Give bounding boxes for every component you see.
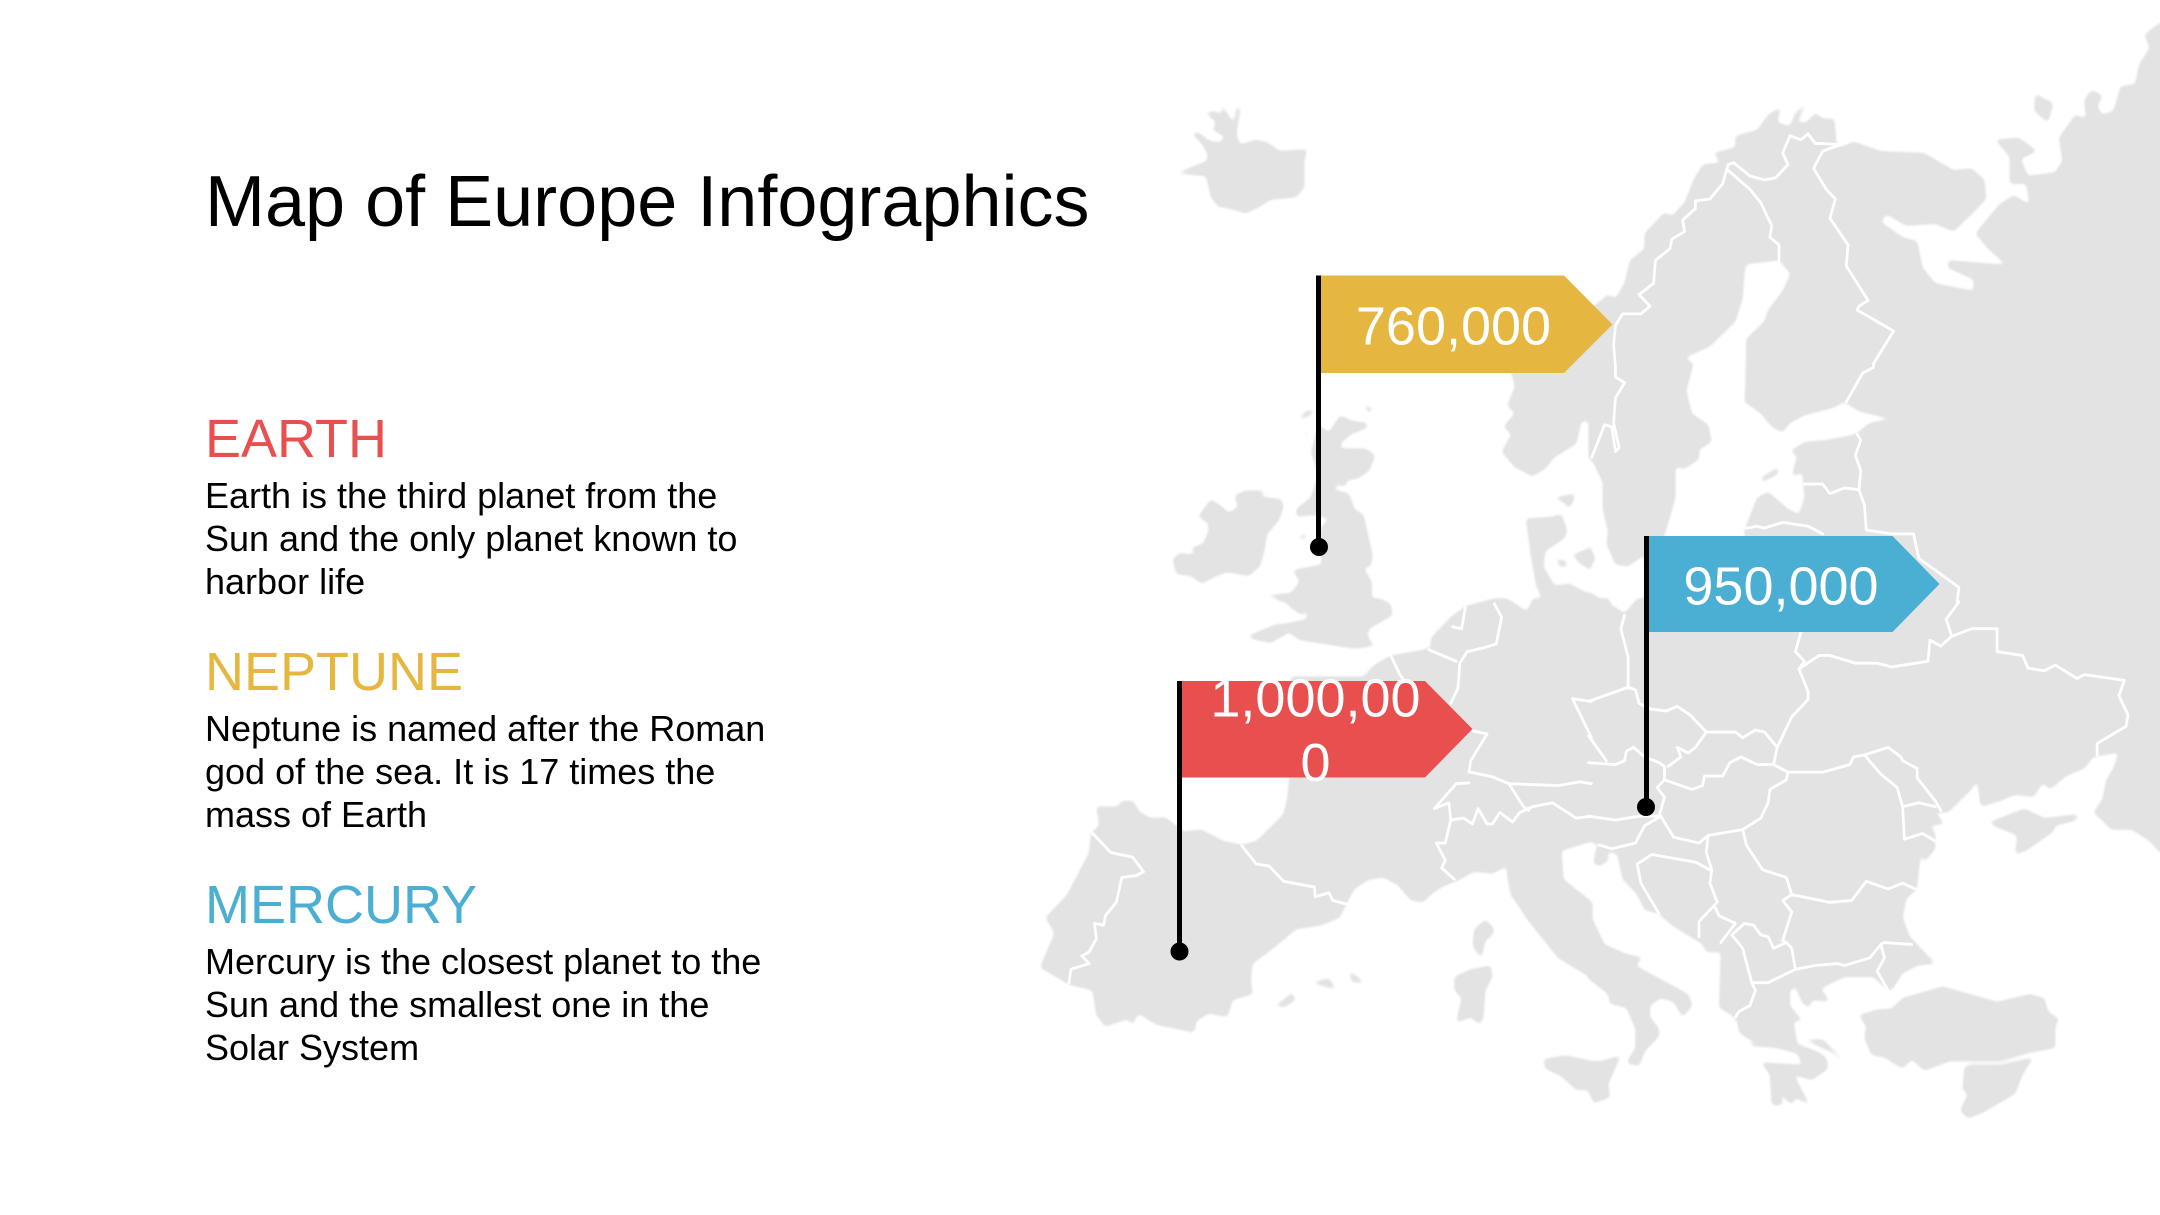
land: south-west (France, Iberia, islands) [1040, 598, 1593, 1090]
text: Mercury description: Solar System [205, 1027, 419, 1068]
borders: Nordic and Baltic [1592, 134, 1959, 602]
Iceland [1176, 104, 1307, 214]
islands and south coast [1589, 94, 2053, 602]
heading: Earth: EARTH [205, 409, 387, 469]
borders: central and eastern Europe [1589, 602, 2128, 1017]
flag: yellow 760,000 [1310, 276, 1612, 556]
text: Mercury description: Mercury is the closest planet to the [205, 941, 761, 982]
land: south-east (central Europe, Balkans, Ukraine, Turkey) [1589, 598, 2160, 1119]
section: Earth [205, 409, 737, 602]
Ireland [1173, 491, 1284, 584]
heading: Neptune: NEPTUNE [205, 642, 463, 702]
central and eastern land mass [1589, 598, 2160, 1105]
flag: red 1,000,000 [1170, 668, 1472, 960]
northern land mass [1589, 23, 2160, 602]
section: Mercury [205, 875, 761, 1068]
southern England [1247, 598, 1393, 649]
flag: blue 950,000 [1637, 536, 1940, 816]
land masses [1025, 5, 2160, 1210]
Italian peninsula [1589, 902, 1693, 1066]
text: Neptune description: Neptune is named after the Roman [205, 708, 765, 749]
Scottish islands [1296, 404, 1373, 540]
text: Mercury description: Sun and the smallest one in the [205, 984, 709, 1025]
section: Neptune [205, 642, 765, 835]
text: Neptune description: god of the sea. It is 17 times the [205, 751, 715, 792]
flag: yellow 760,000: 760,000 [1356, 296, 1551, 356]
title: Map of Europe Infographics [205, 162, 1090, 242]
text: Neptune description: mass of Earth [205, 794, 427, 835]
Crimea [1990, 809, 2077, 854]
flag: red 1,000,000: 0 [1300, 733, 1331, 793]
land: north-east (Scandinavia, Finland, Baltics, Russia) [1589, 23, 2160, 602]
Norway south [1502, 306, 1593, 476]
Denmark [1526, 494, 1591, 602]
map of Europe [1025, 5, 2160, 1210]
flag: blue 950,000: 950,000 [1683, 556, 1879, 616]
Baltic Sea [1645, 260, 1892, 551]
text: Earth description: Earth is the third planet from the [205, 475, 717, 516]
Anatolia [1859, 987, 2059, 1071]
borders: western Europe [1069, 604, 1591, 983]
flag: red 1,000,000: 1,000,00 [1210, 668, 1421, 728]
text: Earth description: harbor life [205, 561, 365, 602]
heading: Mercury: MERCURY [205, 875, 477, 935]
continental land west [1040, 598, 1593, 1032]
southern Turkey and islands [1589, 1039, 2033, 1119]
Great Britain north [1267, 415, 1376, 602]
text: Earth description: Sun and the only planet known to [205, 518, 737, 559]
Mediterranean islands [1274, 920, 1593, 1090]
land: north-west (Iceland, British Isles, south Norway) [1173, 104, 1593, 602]
